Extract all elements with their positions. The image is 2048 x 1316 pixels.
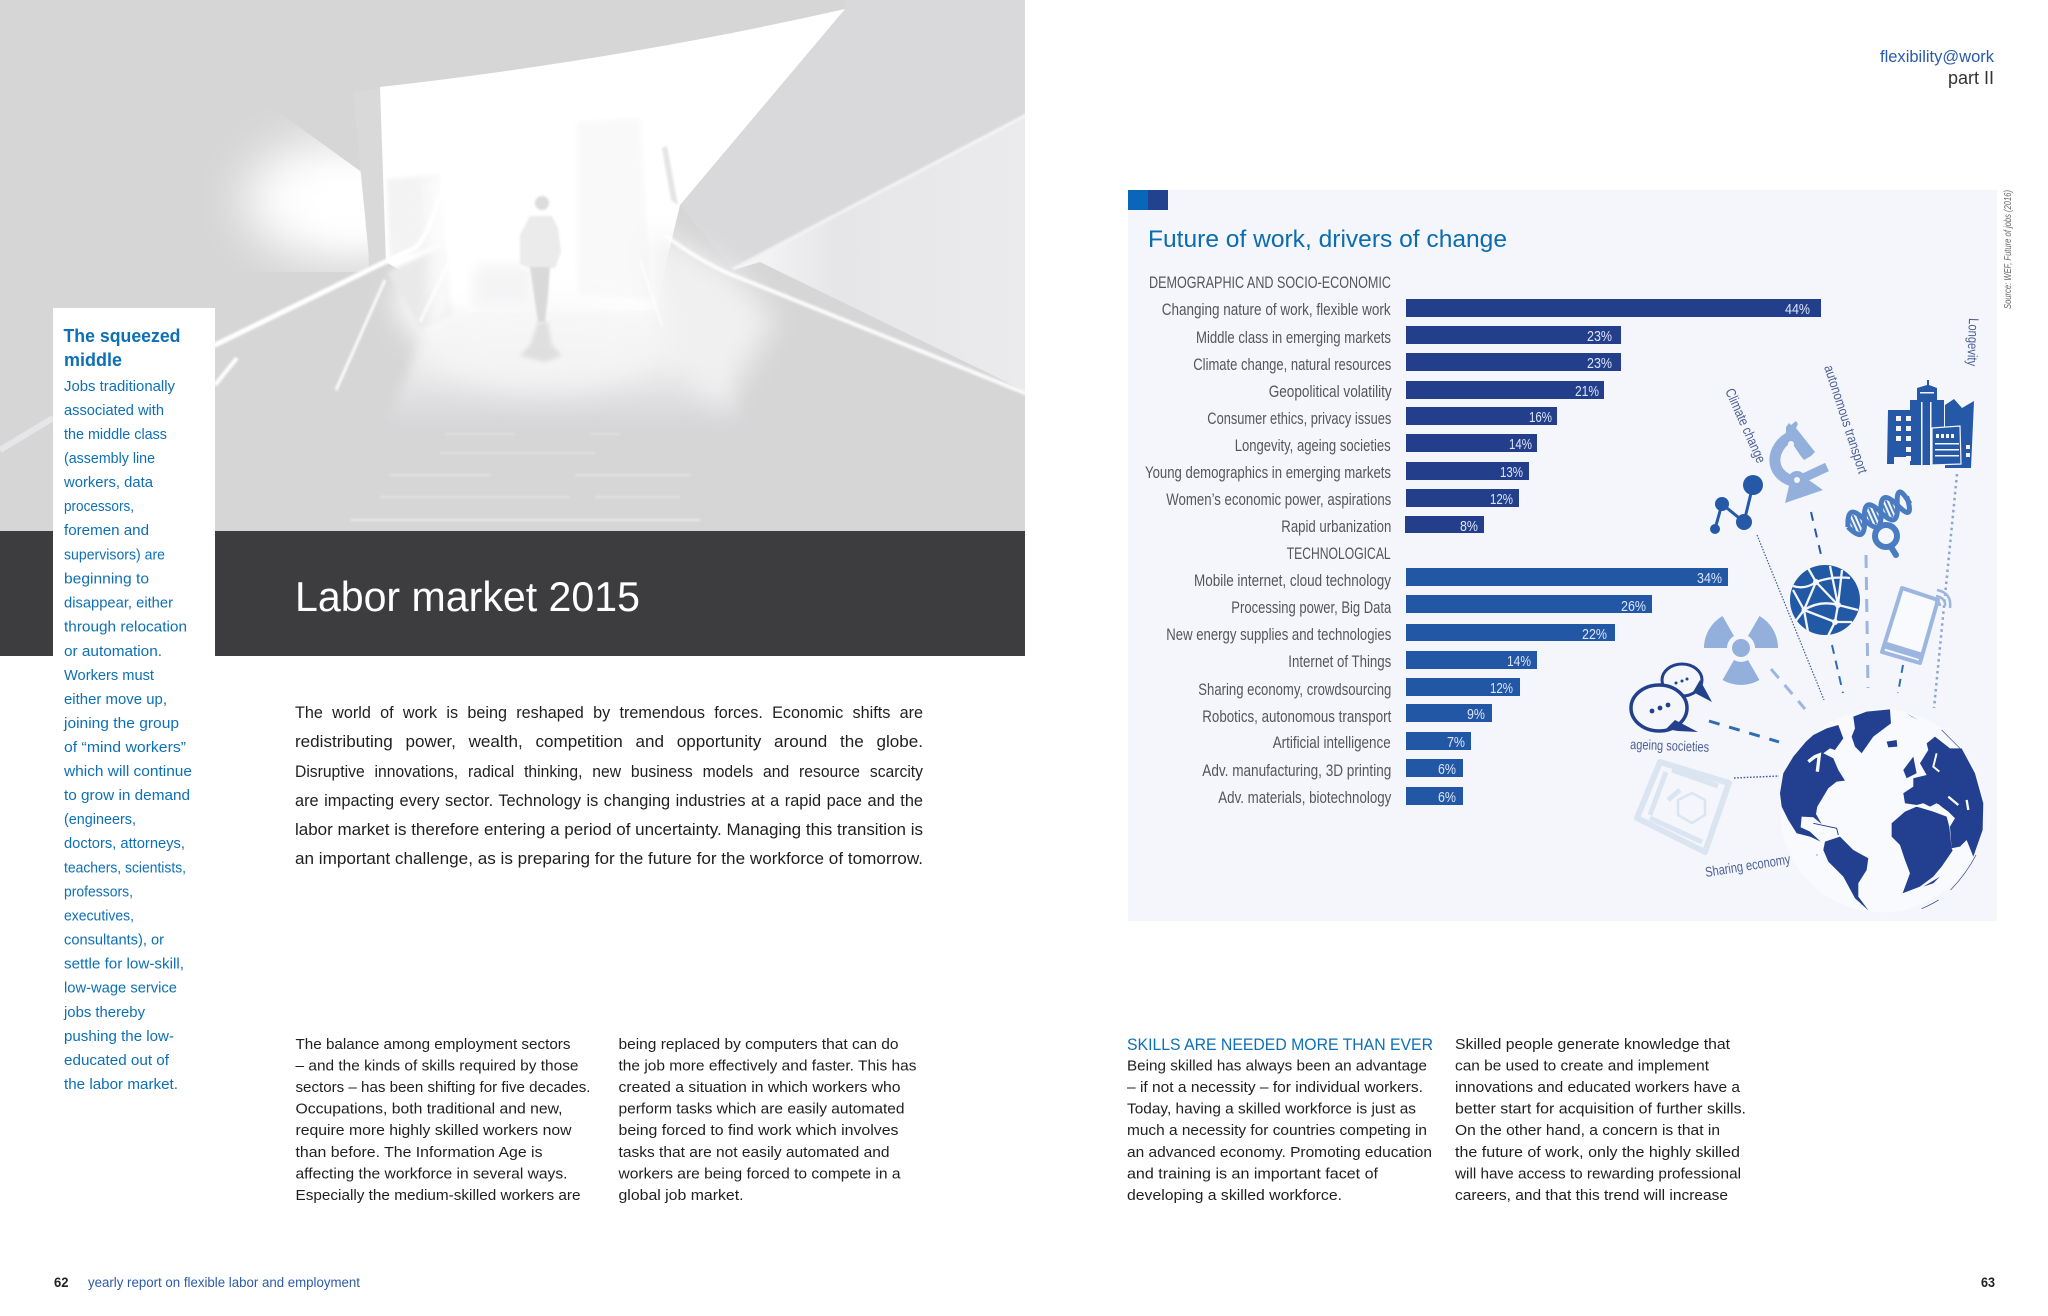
bar chart: demographic and socio-economic: Climate change, natural resources [1193,356,1391,374]
bar chart: demographic and socio-economic: 14% [1509,437,1532,453]
sidebar body text: workers, data [63,474,154,491]
icon label: climate change: Climate change [1722,386,1769,465]
icon: 3D printer [1637,762,1729,852]
sidebar body text: of “mind workers” [64,739,186,756]
intro paragraph: Disruptive innovations, radical thinking, new business models and resource scarcity [295,762,923,781]
bar chart: demographic and socio-economic: 23% [1587,356,1612,372]
rails [0,418,53,450]
body column 3: – if not a necessity – for individual workers. [1127,1079,1423,1096]
icon: chat bubbles [1631,664,1712,732]
bar chart: technological: Processing power, Big Data [1231,599,1392,617]
bar chart: technological: New energy supplies and technologies [1166,626,1391,644]
bar chart: demographic and socio-economic: 8% [1460,519,1478,535]
body column 4: will have access to rewarding professional [1454,1166,1741,1182]
body column 4: can be used to create and implement [1455,1058,1710,1074]
body column 3: developing a skilled workforce. [1127,1187,1342,1204]
sidebar body text: educated out of [64,1052,170,1069]
bar chart: technological: 22% [1582,627,1607,643]
bar chart: demographic and socio-economic: Changing nature of work, flexible work [1162,301,1391,319]
bar chart: demographic and socio-economic: Rapid urbanization [1281,518,1391,536]
bar chart: technological: Adv. manufacturing, 3D printing [1202,762,1391,780]
body column 4 [1454,1036,1746,1204]
sidebar body text: supervisors) are [64,546,165,564]
body column 3 [1127,1058,1432,1204]
body column 3: much a necessity for countries competing in [1127,1122,1427,1139]
sidebar body text: joining the group [63,715,179,732]
sidebar body text: (engineers, [64,811,136,828]
bar chart: technological: 7% [1447,735,1465,751]
body column 2: created a situation in which workers who [618,1079,900,1096]
bar chart: demographic and socio-economic: Geopolitical volatility [1269,383,1392,401]
panel: future of work chart [1128,190,1997,921]
intro paragraph: The world of work is being reshaped by tremendous forces. Economic shifts are [295,703,923,722]
footer left: page number and report name: 62 [54,1275,68,1290]
source note: Source: WEF, Future of jobs (2016) [2003,190,2014,309]
sidebar body text: associated with [64,402,164,419]
body column 4: careers, and that this trend will increase [1455,1187,1728,1204]
sidebar body text: low-wage service [64,980,177,997]
sidebar body text: executives, [64,908,134,924]
title: Labor market 2015: Labor market 2015 [295,573,640,620]
sidebar body text: the labor market. [64,1076,178,1093]
sidebar body text: beginning to [64,570,149,588]
body column 2: global job market. [618,1187,744,1204]
body column 1: than before. The Information Age is [296,1144,542,1161]
body column 1 [296,1036,590,1204]
bar chart: technological: 12% [1490,681,1513,697]
icon: internet globe [1790,565,1860,636]
body column 2: being replaced by computers that can do [618,1036,898,1053]
sidebar heading [64,325,180,370]
footer left: page number and report name: yearly report on flexible labor and employment [88,1275,360,1290]
bar chart: technological: 6% [1438,762,1456,778]
bar chart: technological: Mobile internet, cloud technology [1194,572,1392,590]
sidebar heading: The squeezed [64,325,180,346]
body column 3: an advanced economy. Promoting education [1127,1144,1432,1161]
running header [1880,48,1995,88]
sidebar body text: the middle class [64,426,167,443]
sidebar body text: doctors, attorneys, [64,835,185,852]
bar chart: technological: Robotics, autonomous transport [1202,708,1392,726]
sidebar: The squeezed middle [53,308,215,1093]
sidebar body text: foremen and [64,522,149,539]
stair highlights [350,519,700,521]
running header: flexibility@work [1880,48,1995,66]
sidebar body text: to grow in demand [64,787,190,804]
bar chart: technological [1166,545,1728,807]
bar chart: technological: 34% [1697,571,1722,587]
bar chart: technological: Adv. materials, biotechnology [1218,789,1392,807]
bar chart: demographic and socio-economic: Middle class in emerging markets [1196,329,1391,347]
bar chart: demographic and socio-economic: Consumer ethics, privacy issues [1207,410,1391,428]
chart title: Future of work, drivers of change [1148,226,1507,253]
bar chart: demographic and socio-economic: Longevity, ageing societies [1235,437,1391,455]
body column 1: require more highly skilled workers now [296,1122,572,1139]
body column 1: The balance among employment sectors [296,1036,570,1053]
body column 4: better start for acquisition of further skills. [1455,1100,1746,1118]
sidebar body text: settle for low-skill, [64,956,184,973]
icon label: sharing economy: Sharing economy [1704,851,1791,880]
body column 1: Occupations, both traditional and new, [296,1100,562,1118]
bar chart: technological: Internet of Things [1288,653,1391,671]
body column 2: tasks that are not easily automated and [618,1144,890,1161]
body column 4: Skilled people generate knowledge that [1455,1036,1731,1053]
bar chart: technological: 6% [1438,790,1456,806]
bar chart: technological: 26% [1621,599,1646,615]
sidebar body text: consultants), or [64,932,164,949]
bar chart: demographic and socio-economic: 12% [1490,492,1513,508]
sidebar body text: jobs thereby [63,1004,145,1021]
bar chart: demographic and socio-economic: 44% [1785,302,1810,318]
sidebar body text: or automation. [64,643,162,660]
sidebar body text: Jobs traditionally [64,378,175,395]
icon: microscope [1775,421,1827,503]
sidebar body text: (assembly line [64,450,155,467]
bar chart: demographic and socio-economic: DEMOGRAPHIC AND SOCIO-ECONOMIC [1149,274,1391,292]
body column 1: Especially the medium-skilled workers are [296,1187,580,1204]
sidebar body text: pushing the low- [64,1028,174,1045]
sidebar body text: processors, [64,498,134,515]
body column 3: and training is an important facet of [1127,1166,1379,1182]
title band [0,531,1025,656]
panel marker squares [1128,190,1168,210]
sidebar body text: either move up, [64,691,167,708]
bar chart: demographic and socio-economic: 21% [1575,384,1599,400]
bar chart: technological: Artificial intelligence [1273,734,1391,752]
sidebar body text: through relocation [64,619,187,636]
icon: radiation symbol [1704,616,1778,685]
sidebar body text: disappear, either [64,595,173,612]
body column 4: innovations and educated workers have a [1455,1079,1741,1096]
body column 2: being forced to find work which involves [618,1122,898,1139]
icon: city buildings [1887,380,1974,468]
intro paragraph: are impacting every sector. Technology is changing industries at a rapid pace and the [295,791,923,810]
intro paragraph: redistributing power, wealth, competition and opportunity around the globe. [295,732,923,751]
body column 1: affecting the workforce in several ways. [296,1166,568,1182]
body column 3: Being skilled has always been an advantage [1127,1058,1427,1074]
person [520,196,561,322]
intro paragraph: labor market is therefore entering a period of uncertainty. Managing this transition is [295,820,923,839]
sidebar heading: middle [64,349,122,370]
bar chart: demographic and socio-economic: 23% [1587,329,1612,345]
bar chart: technological: TECHNOLOGICAL [1287,545,1391,563]
icon: network nodes [1710,475,1763,534]
icon label: ageing societies: ageing societies [1630,736,1709,755]
icon: smartphone with signal [1882,588,1950,663]
sidebar body text [63,378,192,1093]
bar chart: demographic and socio-economic: 13% [1500,465,1523,481]
photo: person walking up stairs toward light [0,0,1030,532]
icon label: longevity: Longevity [1964,318,1982,366]
bar chart: technological: 9% [1467,707,1485,723]
body column 3: Today, having a skilled workforce is just as [1127,1100,1416,1118]
section heading: skills: SKILLS ARE NEEDED MORE THAN EVER [1127,1035,1433,1054]
body column 2: workers are being forced to compete in a [617,1166,901,1182]
intro paragraph: an important challenge, as is preparing for the future for the workforce of tomorrow. [295,849,923,868]
body column 4: the future of work, only the highly skilled [1455,1144,1740,1161]
sidebar body text: Workers must [64,667,155,684]
footer right: page number: 63 [1981,1275,1995,1290]
icon label: autonomous transport: autonomous transport [1821,363,1871,475]
bar chart: demographic and socio-economic: 16% [1529,410,1552,426]
bar chart: technological: 14% [1507,654,1531,670]
body column 1: – and the kinds of skills required by those [296,1058,578,1074]
icon: DNA and magnifier [1843,489,1913,555]
running header: part II [1948,68,1994,88]
sidebar body text: which will continue [63,763,192,780]
intro paragraph [295,703,923,868]
body column 4: On the other hand, a concern is that in [1455,1122,1720,1139]
connector lines to globe [1709,474,1957,778]
icon: earth globe [1780,709,1983,912]
body column 1: sectors – has been shifting for five decades. [296,1079,590,1096]
sidebar body text: professors, [64,884,133,900]
sidebar body text: teachers, scientists, [64,859,186,876]
bar chart: demographic and socio-economic: Women’s economic power, aspirations [1166,491,1391,509]
bar chart: demographic and socio-economic [1145,274,1821,536]
body column 2: perform tasks which are easily automated [618,1100,904,1118]
body column 2: the job more effectively and faster. This has [618,1058,916,1074]
bar chart: demographic and socio-economic: Young demographics in emerging markets [1145,464,1391,482]
body column 2 [617,1036,916,1204]
bar chart: technological: Sharing economy, crowdsourcing [1198,681,1391,699]
